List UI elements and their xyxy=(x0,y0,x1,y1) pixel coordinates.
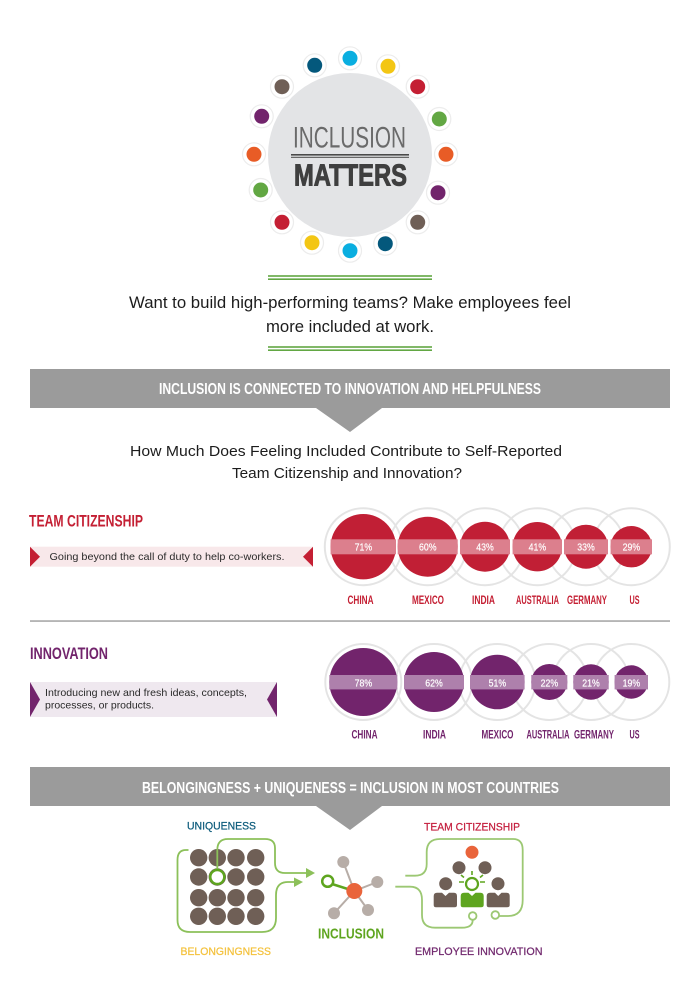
chart: team citizenship by country: AUSTRALIA xyxy=(516,595,559,607)
connector arrows xyxy=(178,839,306,932)
definition ribbon: Introducing new and fresh ideas, concepts, xyxy=(45,687,247,699)
connector lines xyxy=(395,839,523,928)
chart: team citizenship by country: MEXICO xyxy=(412,595,444,607)
definition ribbon: processes, or products. xyxy=(45,700,154,712)
heading: INNOVATION xyxy=(30,644,108,663)
chart: innovation by country xyxy=(325,644,669,742)
definition ribbon xyxy=(30,682,277,717)
chart: team citizenship by country xyxy=(325,508,670,607)
chart: innovation by country: INDIA xyxy=(423,730,446,742)
question text xyxy=(130,443,562,482)
icon: team members with lightbulb xyxy=(434,846,510,907)
chart: innovation by country: 78% xyxy=(355,678,372,690)
banner: inclusion connected to innovation xyxy=(30,369,670,432)
definition ribbon: Going beyond the call of duty to help co-workers. xyxy=(50,551,284,563)
chart: innovation by country: 21% xyxy=(582,678,600,690)
chart: team citizenship by country: 71% xyxy=(355,542,372,554)
chart: team citizenship by country: 60% xyxy=(419,542,436,554)
chart: innovation by country: CHINA xyxy=(352,730,378,742)
diagram: uniqueness and belongingness grid xyxy=(178,820,315,958)
label: belongingness: BELONGINGNESS xyxy=(180,946,271,958)
intro text block: more included at work. xyxy=(266,317,434,336)
banner: belongingness plus uniqueness xyxy=(30,767,670,830)
banner: belongingness plus uniqueness: BELONGINGNESS + UNIQUENESS = INCLUSION IN MOST COUNTRIES xyxy=(142,780,559,797)
label: uniqueness: UNIQUENESS xyxy=(187,820,256,832)
diagram: inclusion network xyxy=(318,856,384,942)
panel: title badge xyxy=(242,47,458,262)
intro text block xyxy=(129,275,571,351)
banner: inclusion connected to innovation: INCLUSION IS CONNECTED TO INNOVATION AND HELPFULNESS xyxy=(159,381,541,398)
chart: innovation by country: MEXICO xyxy=(482,730,514,742)
label: team citizenship: TEAM CITIZENSHIP xyxy=(424,822,520,834)
label: employee innovation: EMPLOYEE INNOVATION xyxy=(415,946,543,958)
heading: TEAM CITIZENSHIP xyxy=(29,512,143,530)
chart: innovation by country: 62% xyxy=(425,678,443,690)
ring of coloured dots xyxy=(242,47,458,262)
highlighted unique dot xyxy=(210,870,224,884)
panel: team citizenship description xyxy=(29,512,313,567)
chart: team citizenship by country: US xyxy=(630,595,640,607)
chart: team citizenship by country: 29% xyxy=(623,542,640,554)
chart: innovation by country: 51% xyxy=(489,678,506,690)
chart: innovation by country: AUSTRALIA xyxy=(526,730,570,742)
chart: team citizenship by country: INDIA xyxy=(472,595,495,607)
definition ribbon xyxy=(30,547,313,567)
chart: team citizenship by country: 33% xyxy=(577,542,595,554)
panel: innovation description xyxy=(30,644,277,717)
intro text block: Want to build high-performing teams? Make employees feel xyxy=(129,293,571,312)
chart: team citizenship by country: GERMANY xyxy=(567,595,607,607)
central grey circle xyxy=(268,73,432,237)
chart: innovation by country: US xyxy=(630,730,640,742)
title: Inclusion: INCLUSION xyxy=(293,122,406,154)
diagram: team outcomes xyxy=(395,822,543,958)
chart: team citizenship by country: 41% xyxy=(529,542,546,554)
chart: team citizenship by country: CHINA xyxy=(348,595,374,607)
dot grid xyxy=(190,849,264,925)
chart: innovation by country: GERMANY xyxy=(574,730,614,742)
label: inclusion: INCLUSION xyxy=(318,926,384,942)
chart: innovation by country: 19% xyxy=(623,678,640,690)
question text: How Much Does Feeling Included Contribute to Self-Reported xyxy=(130,443,562,460)
question text: Team Citizenship and Innovation? xyxy=(232,465,462,482)
title: Matters: MATTERS xyxy=(294,158,407,192)
chart: team citizenship by country: 43% xyxy=(476,542,494,554)
chart: innovation by country: 22% xyxy=(541,678,558,690)
